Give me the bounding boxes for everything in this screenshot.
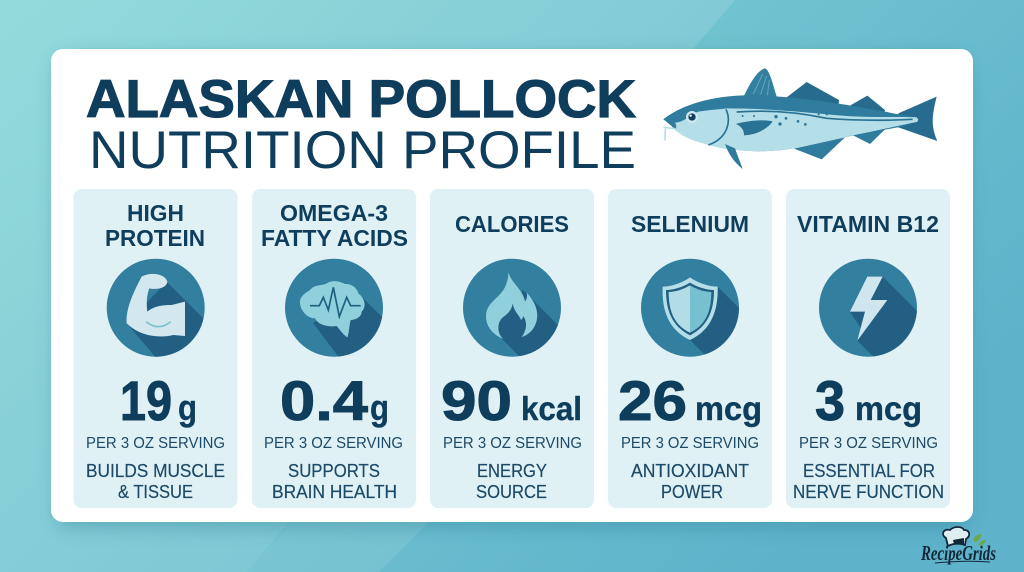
serving label: PER 3 OZ SERVING (621, 435, 759, 452)
logo: RecipeGrids: RecipeGrids (920, 541, 996, 565)
description: NERVE FUNCTION (793, 482, 944, 502)
icon: lightning bolt (819, 258, 917, 357)
heading: omega-3 fatty acids: FATTY ACIDS (261, 225, 408, 251)
serving label: PER 3 OZ SERVING (799, 435, 938, 452)
value: 0.4g: 0.4 (280, 369, 368, 432)
title: ALASKAN POLLOCK (86, 70, 636, 129)
logo: RecipeGrids (920, 527, 996, 565)
value: 3 mcg (815, 369, 922, 432)
icon: flexed arm (106, 258, 205, 357)
value: 26 mcg (618, 369, 762, 432)
white panel (51, 49, 973, 522)
heading: calories: CALORIES (455, 211, 569, 237)
description: ANTIOXIDANT (631, 461, 749, 481)
serving label: PER 3 OZ SERVING (264, 435, 403, 452)
serving label: PER 3 OZ SERVING (86, 435, 225, 452)
description (631, 461, 749, 502)
panel shadow (55, 55, 969, 528)
description (793, 461, 944, 502)
description: BUILDS MUSCLE (86, 461, 225, 481)
icon: shield (641, 258, 739, 357)
value: 26 mcg: 26 (618, 369, 687, 432)
description: BRAIN HEALTH (272, 482, 397, 502)
description: SUPPORTS (288, 461, 380, 481)
title: NUTRITION PROFILE (89, 121, 636, 180)
value: 19g: 19 (120, 369, 172, 432)
value: 0.4g: g (370, 387, 389, 428)
description: & TISSUE (118, 482, 193, 502)
value: 90 kcal (441, 369, 582, 432)
description: SOURCE (476, 482, 547, 502)
heading: vitamin b12: VITAMIN B12 (797, 211, 939, 237)
heading: high protein: PROTEIN (105, 225, 205, 251)
value: 90 kcal: kcal (521, 390, 582, 427)
panel: omega-3 fatty acids (252, 189, 416, 508)
value: 3 mcg: mcg (855, 390, 922, 427)
description (476, 461, 547, 502)
description (272, 461, 397, 502)
description: POWER (661, 482, 723, 502)
panel: selenium (608, 189, 778, 508)
heading: high protein (105, 200, 205, 251)
heading: omega-3 fatty acids (261, 200, 408, 251)
value: 19g: g (178, 387, 197, 428)
illustration: pollock fish (663, 68, 937, 169)
value: 90 kcal: 90 (441, 369, 512, 432)
description: ESSENTIAL FOR (803, 461, 935, 481)
title (86, 70, 636, 180)
description (86, 461, 225, 502)
panel: calories (430, 189, 594, 508)
description: ENERGY (477, 461, 547, 481)
heading: selenium: SELENIUM (631, 211, 749, 237)
icon: brain with pulse (285, 258, 383, 357)
icon: flame (463, 258, 561, 357)
heading: omega-3 fatty acids: OMEGA-3 (280, 200, 388, 226)
panel: high protein (74, 189, 238, 508)
panel: vitamin b12 (786, 189, 950, 508)
heading: high protein: HIGH (127, 200, 184, 226)
serving label: PER 3 OZ SERVING (443, 435, 582, 452)
value: 3 mcg: 3 (815, 369, 845, 432)
value: 26 mcg: mcg (695, 390, 762, 427)
